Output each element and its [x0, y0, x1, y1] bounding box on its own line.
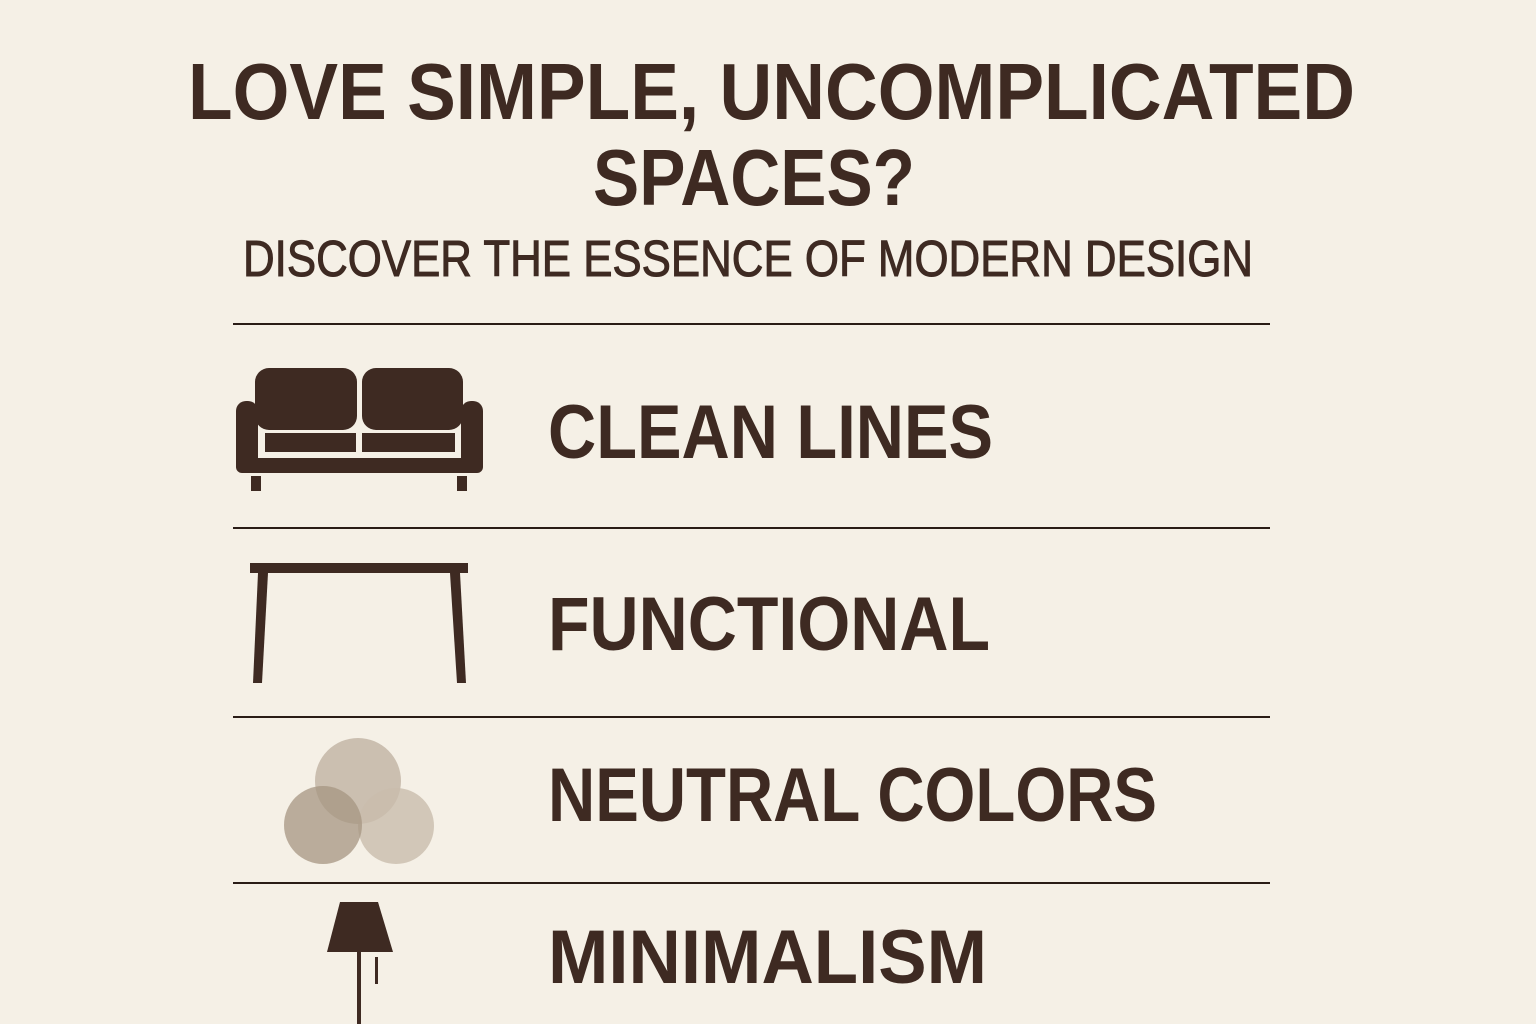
subtitle: DISCOVER THE ESSENCE OF MODERN DESIGN: [243, 230, 1253, 287]
label: functional: FUNCTIONAL: [548, 582, 990, 667]
icon: sofa: [236, 368, 483, 491]
title: LOVE SIMPLE, UNCOMPLICATED: [188, 47, 1355, 136]
label: neutral colors: NEUTRAL COLORS: [548, 753, 1157, 838]
label: minimalism: MINIMALISM: [548, 915, 987, 1000]
icon: table: [250, 563, 468, 683]
title: SPACES?: [593, 133, 915, 222]
icon: color circles: [284, 738, 434, 864]
title: [188, 47, 1355, 222]
icon: lamp: [327, 902, 393, 1024]
label: clean lines: CLEAN LINES: [548, 390, 993, 475]
